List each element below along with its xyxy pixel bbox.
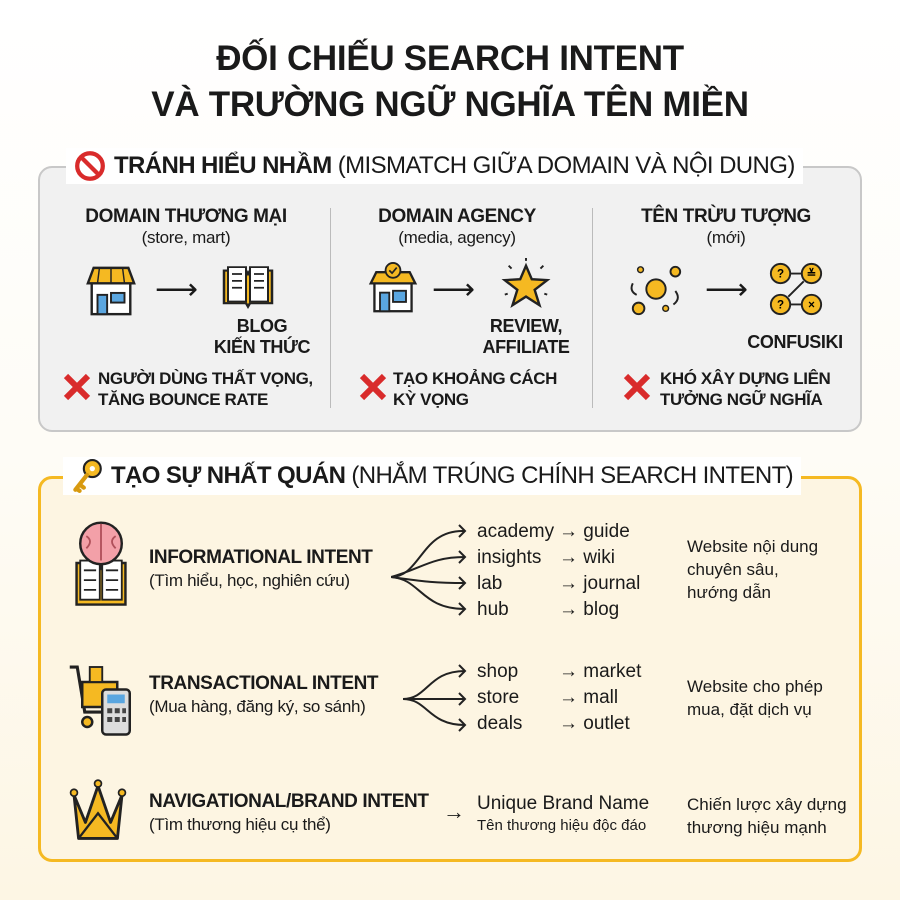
column: commercial domain: DOMAIN THƯƠNG MẠI [85,206,287,227]
column: commercial domain [64,206,313,409]
panel heading: consistency: (NHẮM TRÚNG CHÍNH SEARCH INTENT) [351,462,793,489]
row: transactional: deals [477,713,522,734]
column: abstract name: CONFUSIKI [747,332,843,352]
row: navigational: Chiến lược xây dựng [687,795,847,814]
row: informational: → wiki [559,547,615,568]
icon: confusion nodes: ≚ [807,267,817,280]
column: agency domain [360,206,570,409]
arrow: ⟶ [432,273,475,306]
icon: confusion nodes: ? [777,298,784,311]
column: agency domain: TẠO KHOẢNG CÁCH [393,369,557,388]
row: transactional: store [477,687,519,708]
icon: red x [64,374,90,400]
title [151,38,749,124]
icon: confusion nodes [770,262,822,316]
row: transactional: → mall [559,687,618,708]
row: informational: INFORMATIONAL INTENT [149,547,372,568]
title: ĐỐI CHIẾU SEARCH INTENT [216,39,684,78]
panel: mismatch [38,166,862,432]
icon: verified store [368,262,418,312]
row: informational: hướng dẫn [687,583,771,602]
row: navigational: (Tìm thương hiệu cụ thể) [149,815,331,834]
panel heading: consistency [63,457,801,495]
row: transactional: TRANSACTIONAL INTENT [149,673,378,694]
row: navigational: thương hiệu mạnh [687,818,827,837]
row: informational: lab [477,573,502,594]
row: transactional [70,661,823,736]
panel heading: consistency: TẠO SỰ NHẤT QUÁN [111,462,345,489]
panel: consistency [38,476,862,862]
column: abstract name: (mới) [707,228,745,247]
row: informational: (Tìm hiểu, học, nghiên cứu) [149,571,350,590]
row: navigational: Unique Brand Name [477,793,649,814]
column: abstract name: TÊN TRỪU TƯỢNG [641,206,811,227]
row: informational: → journal [559,573,640,594]
divider lines [330,208,331,408]
arrow: ⟶ [705,273,748,306]
row: navigational [70,779,847,840]
column: abstract name: TƯỞNG NGỮ NGHĨA [660,390,822,409]
icon: red x [360,374,386,400]
column: agency domain: AFFILIATE [482,337,570,357]
row: informational [75,521,818,620]
row: informational: academy [477,521,554,542]
column: abstract name [624,204,843,409]
panel heading: mismatch: TRÁNH HIỂU NHẦM [114,152,332,179]
title: VÀ TRƯỜNG NGỮ NGHĨA TÊN MIỀN [151,85,749,124]
column: commercial domain: NGƯỜI DÙNG THẤT VỌNG, [98,369,313,388]
icon: brain book [75,522,127,606]
arrow: ⟶ [155,273,198,306]
row: transactional: Website cho phép [687,677,823,696]
icon: prohibited [75,151,105,181]
row: informational: insights [477,547,541,568]
row: transactional: → outlet [559,713,630,734]
column: commercial domain: BLOG [237,316,287,336]
row: informational: → blog [559,599,619,620]
row: informational: → guide [559,521,630,542]
column: commercial domain: TĂNG BOUNCE RATE [98,390,268,409]
row: transactional: shop [477,661,518,682]
column: commercial domain: (store, mart) [142,228,230,247]
column: agency domain: DOMAIN AGENCY [378,206,536,227]
icon: confusion nodes: × [808,298,815,311]
icon: scattered dots [630,266,682,316]
row: informational: Website nội dung [687,537,818,556]
row: informational: chuyên sâu, [687,560,779,579]
icon: crown [70,779,126,840]
column: abstract name: KHÓ XÂY DỰNG LIÊN [660,369,830,388]
row: informational: hub [477,599,509,620]
arrow: → [443,799,465,824]
icon: book [222,266,274,309]
column: agency domain: REVIEW, [490,316,562,336]
row: navigational: NAVIGATIONAL/BRAND INTENT [149,791,429,812]
icon: store [86,266,136,316]
icon: cart calculator [70,666,131,736]
column: commercial domain: KIẾN THỨC [214,337,310,357]
arrows: fan out [403,664,466,732]
icon: confusion nodes: ? [777,267,784,280]
column: agency domain: KỲ VỌNG [393,390,469,409]
column: agency domain: (media, agency) [398,228,516,247]
panel heading: mismatch: (MISMATCH GIỮA DOMAIN VÀ NỘI DUNG) [338,152,795,179]
icon: star [502,258,550,308]
row: navigational: Tên thương hiệu độc đáo [477,817,646,834]
arrows: fan out [391,524,466,616]
panel heading: mismatch [66,148,803,184]
icon: key [73,459,102,493]
icon: red x [624,374,650,400]
row: transactional: mua, đặt dịch vụ [687,700,812,719]
row: transactional: → market [559,661,641,682]
row: transactional: (Mua hàng, đăng ký, so sánh) [149,697,366,716]
